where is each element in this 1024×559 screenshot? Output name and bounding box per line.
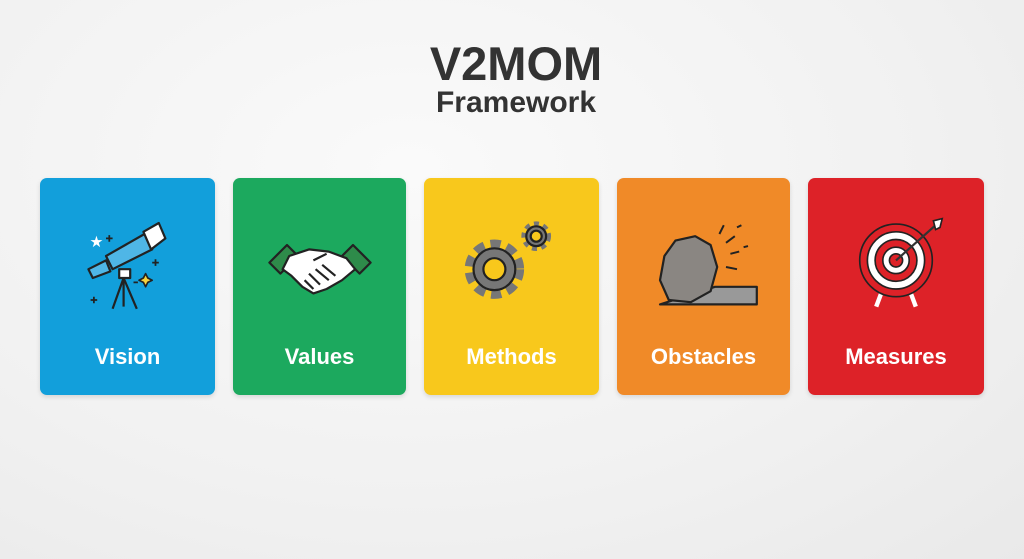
panel: vision <box>40 178 215 395</box>
panel: measures: Measures <box>845 344 947 369</box>
icon: target <box>858 218 944 308</box>
panel: vision: Vision <box>95 344 160 369</box>
icon: handshake <box>268 244 372 294</box>
icon: telescope <box>87 222 166 310</box>
panel: methods: Methods <box>466 344 557 369</box>
panel: values: Values <box>285 344 354 369</box>
subtitle: Framework <box>436 86 596 119</box>
panel: values <box>233 178 406 395</box>
panel: obstacles: Obstacles <box>651 344 756 369</box>
panel: methods <box>424 178 599 395</box>
icon: telescope: ★ <box>89 234 103 251</box>
title: V2MOM <box>430 37 602 90</box>
panel: obstacles <box>617 178 790 395</box>
icon: boulder <box>658 224 758 306</box>
icon: gears <box>464 221 552 299</box>
panel: measures <box>808 178 984 395</box>
